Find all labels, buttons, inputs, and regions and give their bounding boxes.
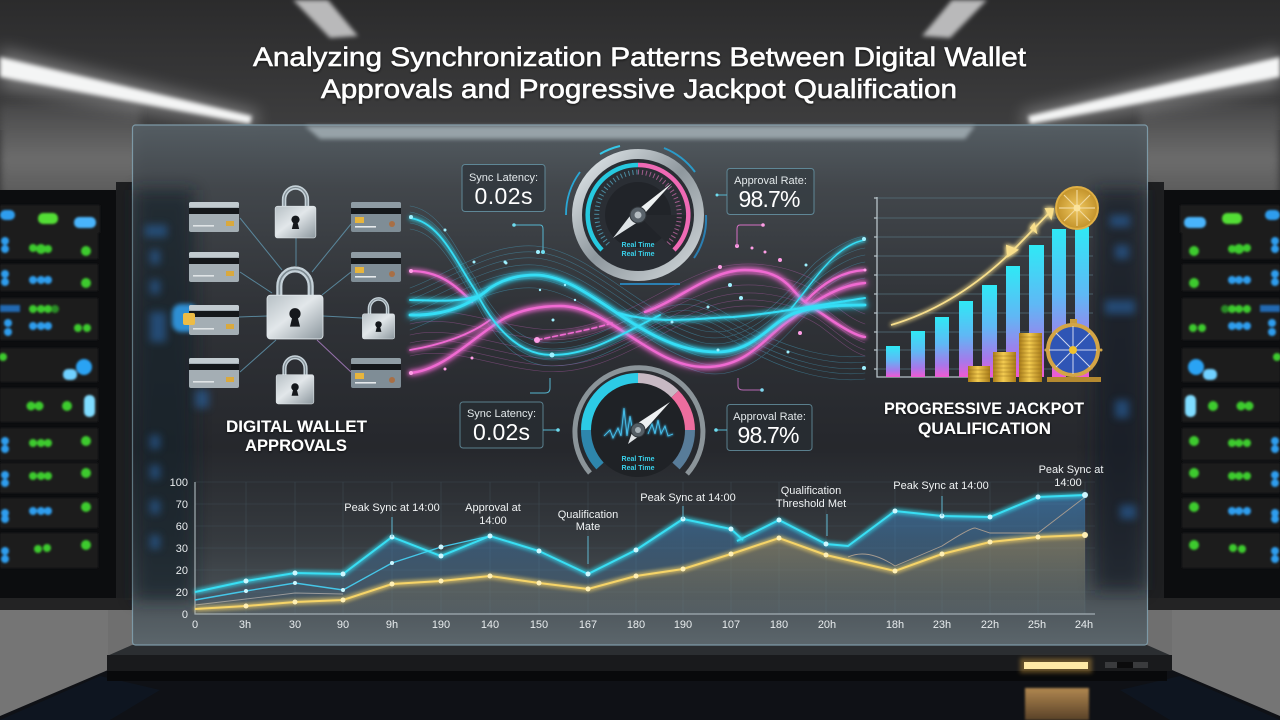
annotations: Qualification <box>781 485 841 497</box>
annotations: 14:00 <box>479 515 507 527</box>
panel: digital wallet approvals <box>172 187 401 455</box>
needle <box>613 183 672 238</box>
callout: approval rate top: Approval Rate: <box>734 175 807 187</box>
title <box>253 42 1027 104</box>
series: yellow <box>195 535 1085 609</box>
annotations: Threshold Met <box>776 498 846 510</box>
wave glow <box>410 270 865 373</box>
heading: digital wallet approvals: APPROVALS <box>245 436 347 455</box>
annotations <box>344 464 1103 533</box>
waveform <box>604 408 673 438</box>
series: cyan main <box>195 519 743 592</box>
x axis labels: 22h <box>981 619 999 631</box>
annotations: Mate <box>576 521 600 533</box>
series: grey reference <box>195 497 1085 605</box>
gauge: top <box>566 146 706 284</box>
gauge: bottom <box>575 368 703 477</box>
gauge label: Real Time <box>622 242 655 249</box>
title: Analyzing Synchronization Patterns Between Digital Wallet <box>253 42 1027 72</box>
x axis labels: 107 <box>722 619 740 631</box>
gauge arcs <box>566 146 706 284</box>
area fills <box>195 495 1085 614</box>
callout: approval rate bottom: Approval Rate: <box>733 411 806 423</box>
y axis labels: 0 <box>182 609 188 621</box>
icon: central lock <box>267 269 323 339</box>
axes <box>195 482 1095 614</box>
x axis labels: 30 <box>289 619 301 631</box>
server rack left <box>0 182 132 610</box>
x axis labels: 190 <box>432 619 450 631</box>
heading: progressive jackpot qualification <box>884 399 1085 438</box>
y axis labels: 60 <box>176 521 188 533</box>
needle <box>628 402 670 444</box>
x axis labels: 190 <box>674 619 692 631</box>
chart: 24-hour line chart <box>170 464 1103 631</box>
gauge label <box>622 242 655 258</box>
x axis labels: 90 <box>337 619 349 631</box>
icon: coin stacks <box>968 333 1042 382</box>
heading: digital wallet approvals: DIGITAL WALLET <box>226 417 368 436</box>
base stand <box>107 645 1172 720</box>
series: thin cyan <box>195 536 490 600</box>
x axis labels: 140 <box>481 619 499 631</box>
callout: approval rate bottom <box>714 378 812 450</box>
x axis labels: 25h <box>1028 619 1046 631</box>
callout: sync latency top: Sync Latency: <box>469 172 538 184</box>
ceiling lights <box>0 0 1280 128</box>
bar chart <box>874 197 1093 377</box>
y axis labels: 20 <box>176 587 188 599</box>
x axis labels: 0 <box>192 619 198 631</box>
y axis labels: 70 <box>176 499 188 511</box>
annotations: Peak Sync at 14:00 <box>640 492 736 504</box>
callout: sync latency top: 0.02s <box>474 183 532 209</box>
annotations: 14:00 <box>1054 477 1082 489</box>
cyan strands <box>410 218 865 355</box>
annotation leader lines <box>392 496 942 564</box>
gauge label: Real Time <box>622 251 655 258</box>
x axis labels: 150 <box>530 619 548 631</box>
gauge label <box>622 456 655 472</box>
data points on waves <box>409 215 866 370</box>
callout: approval rate top: 98.7% <box>738 186 800 212</box>
y axis labels: 20 <box>176 565 188 577</box>
callout: sync latency bottom: Sync Latency: <box>467 408 536 420</box>
arrow: growth trend <box>891 209 1053 325</box>
annotations: Peak Sync at 14:00 <box>344 502 440 514</box>
callout: sync latency bottom: 0.02s <box>473 419 530 445</box>
y axis labels: 30 <box>176 543 188 555</box>
x axis labels: 167 <box>579 619 597 631</box>
y axis labels <box>170 477 188 621</box>
server rack right <box>1148 182 1280 610</box>
gauge label: Real Time <box>622 456 655 463</box>
icon: blue prize wheel <box>1044 319 1102 382</box>
annotations: Qualification <box>558 509 618 521</box>
panel: progressive jackpot qualification <box>874 187 1102 438</box>
icon: card right 2 <box>351 252 401 282</box>
annotations: Approval at <box>465 502 521 514</box>
pink strands <box>410 270 865 373</box>
x axis labels: 3h <box>239 619 251 631</box>
icon: bottom lock <box>276 357 314 404</box>
x axis labels: 9h <box>386 619 398 631</box>
heading: digital wallet approvals <box>226 417 368 455</box>
heading: progressive jackpot qualification: QUALIFICATION <box>918 419 1051 438</box>
icon: card left 1 <box>189 202 239 232</box>
gauge label: Real Time <box>622 465 655 472</box>
data markers <box>244 492 1088 593</box>
grid lines <box>195 482 1095 614</box>
callout: sync latency bottom <box>460 378 560 448</box>
x axis labels: 180 <box>627 619 645 631</box>
x axis labels: 18h <box>886 619 904 631</box>
x axis labels: 180 <box>770 619 788 631</box>
icon: gold wheel <box>1056 187 1098 229</box>
chart: synchronization waves <box>409 206 866 380</box>
icon: card left 3 with chip <box>172 304 239 335</box>
callout: approval rate top <box>716 168 814 246</box>
title: Approvals and Progressive Jackpot Qualification <box>321 74 957 104</box>
icon: top lock <box>275 187 316 238</box>
connector lines <box>239 218 362 372</box>
icon: card left 2 <box>189 252 239 282</box>
x axis labels: 23h <box>933 619 951 631</box>
x axis labels: 24h <box>1075 619 1093 631</box>
heading: progressive jackpot qualification: PROGRESSIVE JACKPOT <box>884 399 1085 418</box>
y axis labels: 100 <box>170 477 188 489</box>
icon: card right 1 <box>351 202 401 232</box>
icon: card right 3 <box>351 358 401 388</box>
x axis labels <box>192 619 1093 631</box>
icon: right lock <box>362 299 395 339</box>
callout: sync latency top <box>462 164 545 254</box>
annotations: Peak Sync at 14:00 <box>893 480 989 492</box>
callout: approval rate bottom: 98.7% <box>738 422 800 448</box>
annotations: Peak Sync at <box>1039 464 1103 476</box>
icon: card left 4 <box>189 358 239 388</box>
x axis labels: 20h <box>818 619 836 631</box>
panel: glass display <box>132 125 1148 645</box>
